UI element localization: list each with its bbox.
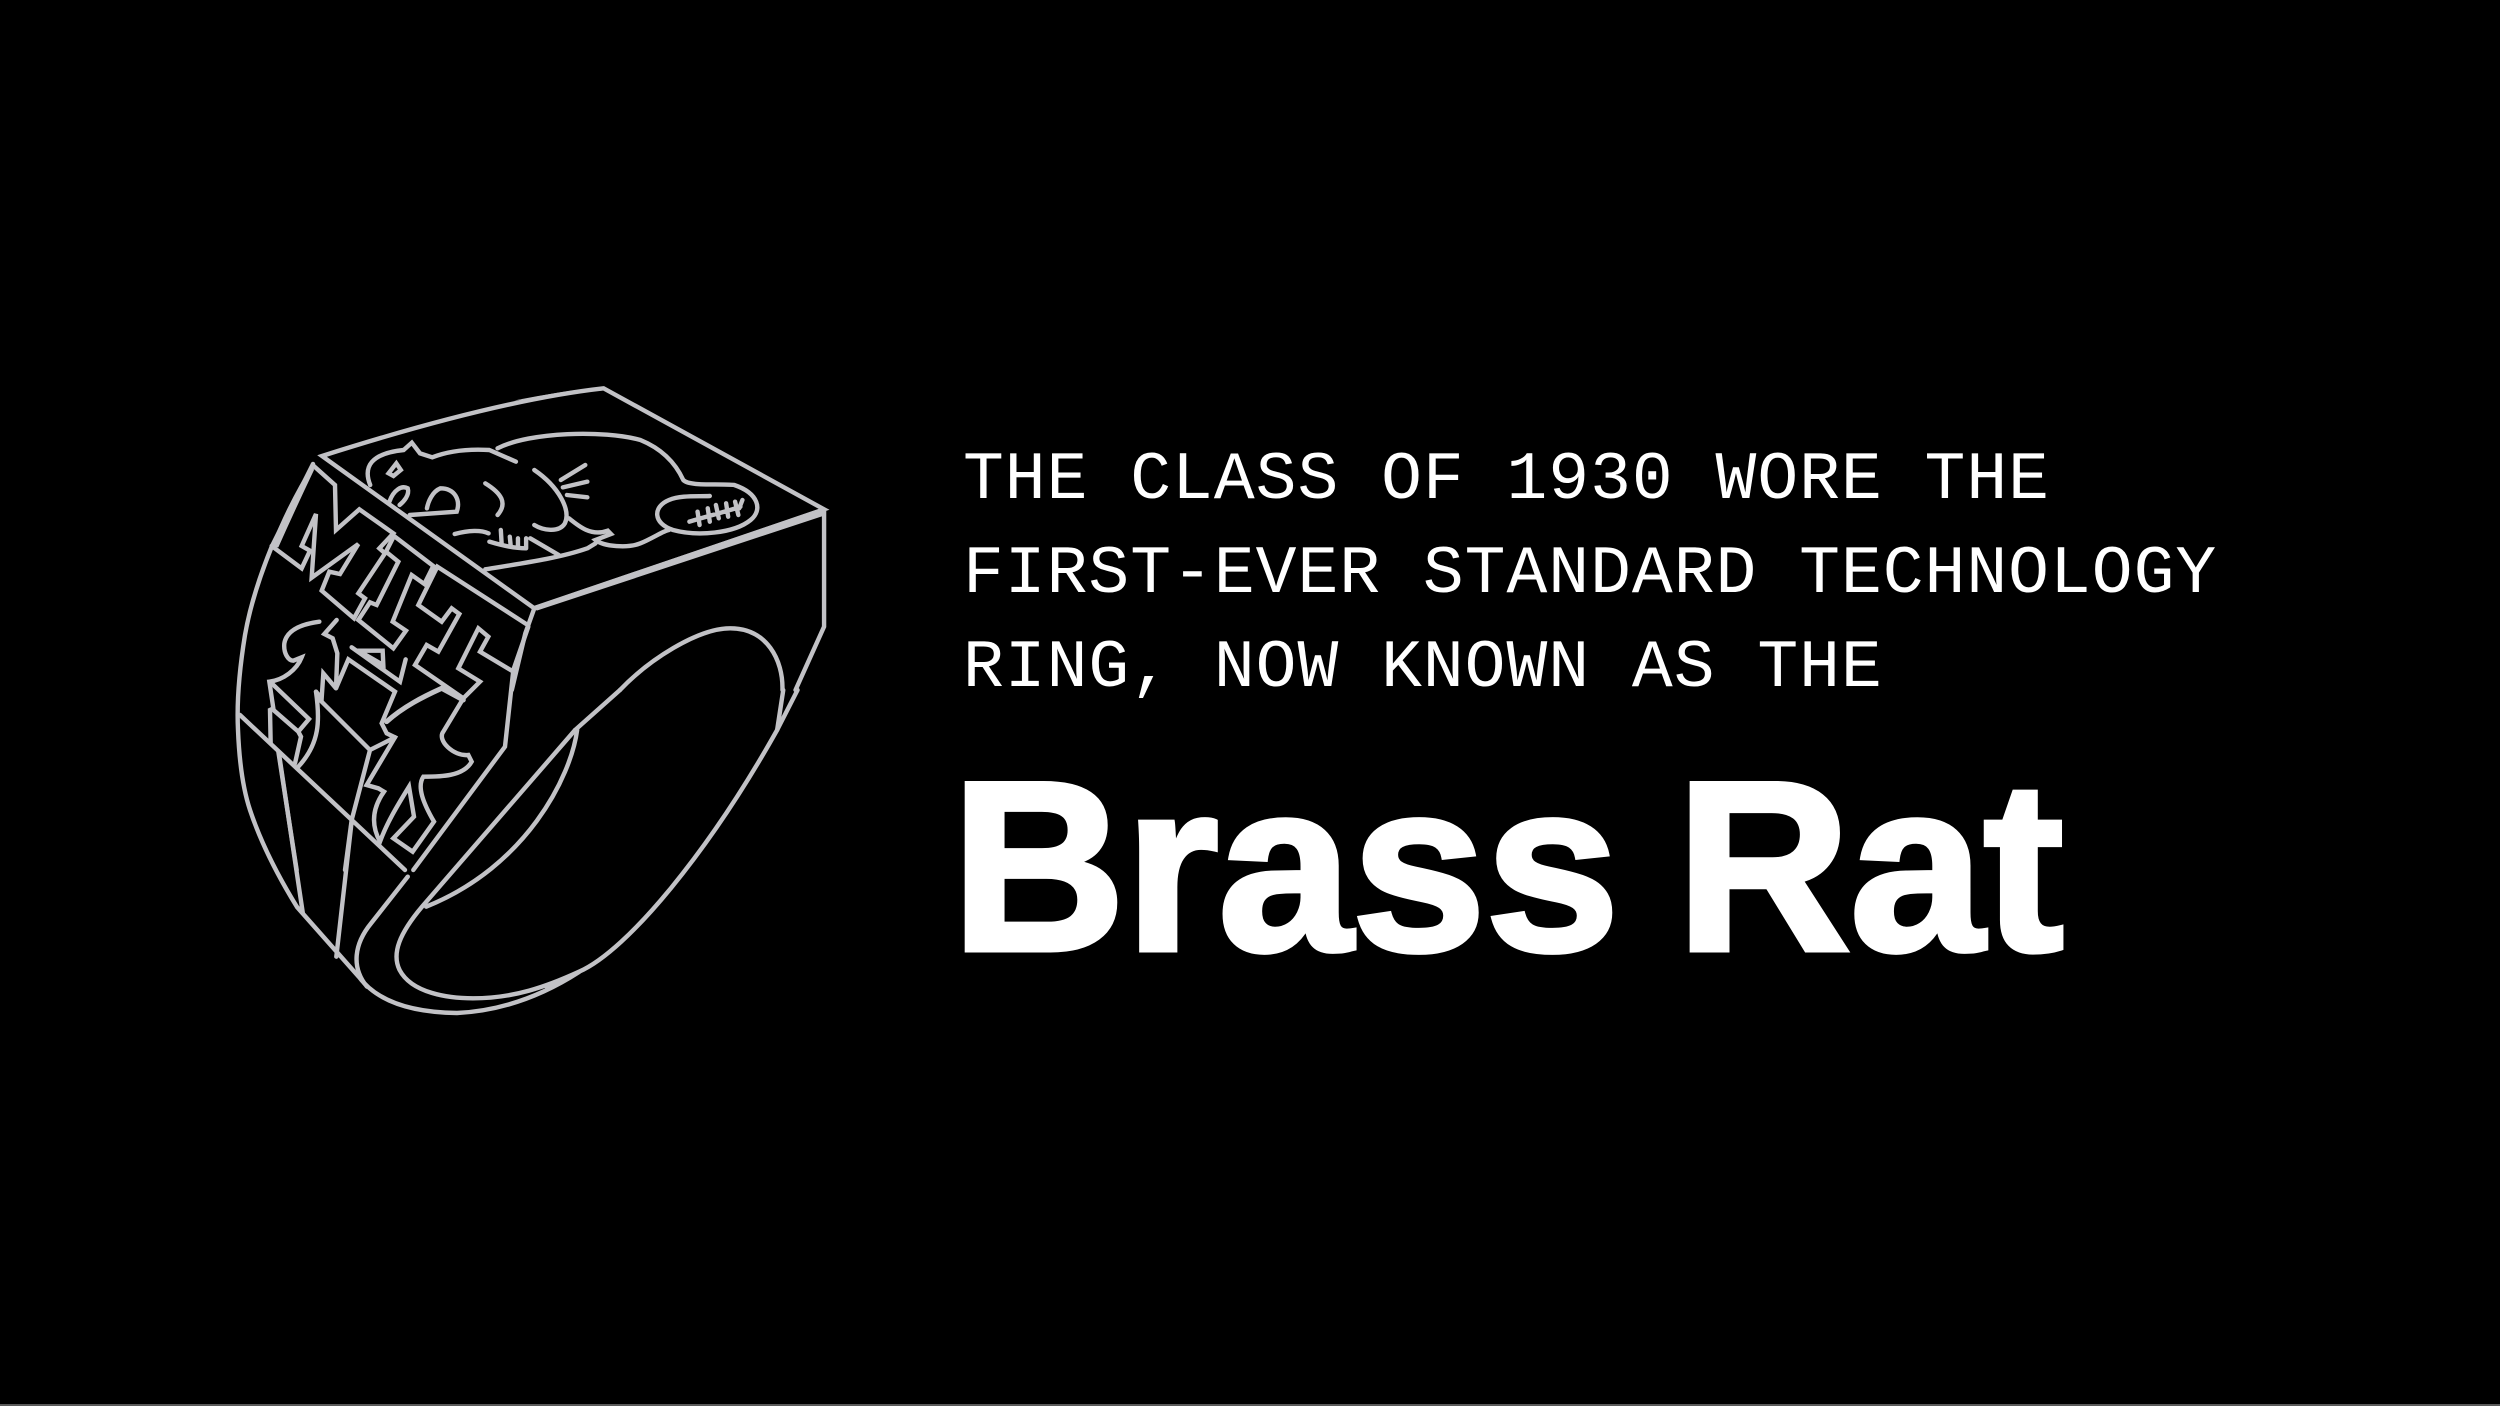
bottom edge line [0,1404,2500,1406]
beaver on ring top [368,434,757,569]
football [689,500,742,525]
ring face lettering upper [271,463,527,698]
intro text block: THE CLASS OF 1930 WORE THE [963,442,2050,519]
ring bottom shank [279,690,798,998]
intro text block: RING, NOW KNOWN AS THE [963,630,1883,707]
ring face figures lower [240,620,528,870]
ring outer contour [238,464,579,1013]
title: Brass Rat [951,732,2063,1002]
intro text block: FIRST-EVER STANDARD TECHNOLOGY [963,536,2217,613]
ring top face and band [322,387,825,690]
intro text block [963,442,2217,707]
